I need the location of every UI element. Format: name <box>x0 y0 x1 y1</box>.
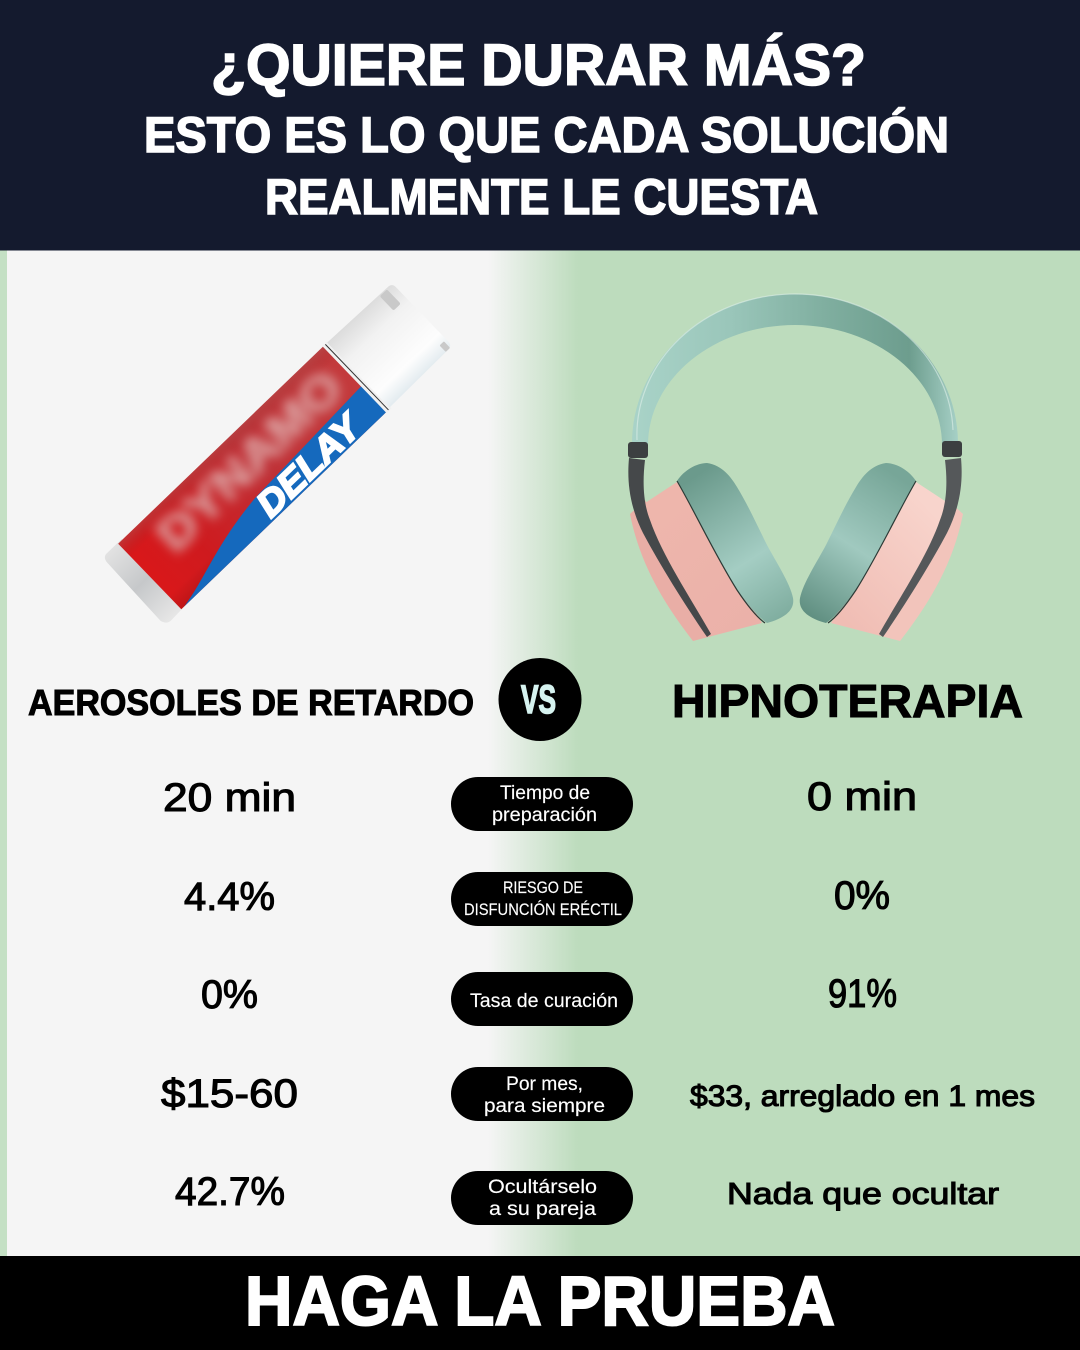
left value: 42.7% <box>175 1170 285 1214</box>
left value: $15-60 <box>161 1072 298 1116</box>
right ear cup <box>800 463 963 641</box>
badge: VS: VS <box>521 678 556 722</box>
label pill: Por mes, <box>506 1074 583 1095</box>
label pill <box>451 777 633 831</box>
panel: comparison background <box>0 250 1080 1260</box>
blurred brand text: DYNAMO <box>146 360 352 561</box>
label text DELAY: DELAY <box>248 404 371 525</box>
label pill: para siempre <box>484 1096 605 1117</box>
badge: VS <box>498 658 582 741</box>
left ear cup <box>630 463 793 641</box>
footer banner <box>0 1256 1080 1350</box>
label pill: DISFUNCIÓN ERÉCTIL <box>464 900 622 919</box>
headband highlight <box>637 294 953 440</box>
tube red body <box>118 346 387 609</box>
label pill: Ocultárselo <box>488 1177 597 1198</box>
tube cap <box>327 282 453 407</box>
tube blue label <box>159 386 387 607</box>
label pill: a su pareja <box>489 1199 596 1220</box>
row: hiding from partner <box>175 1170 999 1225</box>
label pill: RIESGO DE <box>503 878 583 897</box>
label pill <box>451 1171 633 1225</box>
call to action: HAGA LA PRUEBA <box>245 1262 835 1340</box>
heading: right column: HIPNOTERAPIA <box>672 675 1023 727</box>
row: erectile dysfunction risk <box>184 872 890 926</box>
right value: 0 min <box>807 775 917 819</box>
right value: 91% <box>828 972 897 1016</box>
row: cure rate <box>201 972 897 1026</box>
title line 3: REALMENTE LE CUESTA <box>265 169 818 225</box>
label pill: Tasa de curación <box>470 991 618 1012</box>
panel: header <box>0 0 1080 250</box>
label pill: preparación <box>492 805 597 826</box>
right arm <box>879 458 962 637</box>
left value: 0% <box>201 973 258 1017</box>
cap notches <box>380 286 450 358</box>
label pill <box>451 872 633 926</box>
headband <box>632 294 958 445</box>
title line 2: ESTO ES LO QUE CADA SOLUCIÓN <box>144 107 949 163</box>
title line 1: ¿QUIERE DURAR MÁS? <box>211 33 866 98</box>
label pill <box>451 972 633 1026</box>
label pill: Tiempo de <box>500 783 590 804</box>
row: preparation time <box>163 775 917 831</box>
right value: 0% <box>834 874 890 918</box>
left value: 4.4% <box>184 875 275 919</box>
row: monthly cost <box>161 1067 1035 1121</box>
left value: 20 min <box>163 776 296 820</box>
tube collar <box>322 341 392 413</box>
label pill <box>451 1067 633 1121</box>
right slider <box>942 441 962 457</box>
left slider <box>628 442 648 458</box>
icon: headphones <box>628 294 963 641</box>
right value: Nada que ocultar <box>727 1176 999 1211</box>
left arm <box>628 458 711 637</box>
heading: left column: AEROSOLES DE RETARDO <box>28 682 474 723</box>
tube base <box>101 539 186 626</box>
right value: $33, arreglado en 1 mes <box>690 1080 1035 1113</box>
icon: delay spray tube <box>101 281 457 629</box>
